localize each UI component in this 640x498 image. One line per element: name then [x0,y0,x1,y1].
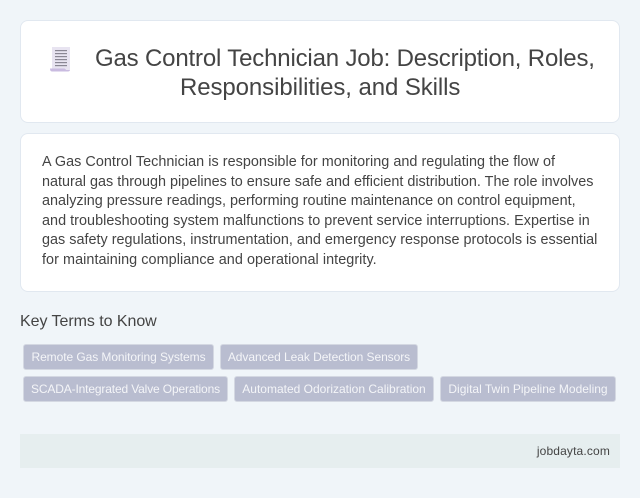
description text [42,154,597,268]
description text: gas safety regulations, instrumentation, and emergency response protocols is essential [42,232,597,248]
tag: Automated Odorization Calibration [242,382,426,396]
panel: title card [20,20,620,123]
tag: SCADA-Integrated Valve Operations [31,382,220,396]
tag [234,376,434,402]
tag: Advanced Leak Detection Sensors [228,350,410,364]
description text: natural gas through pipelines to ensure safe and efficient distribution. The role involves [42,174,593,190]
description text: A Gas Control Technician is responsible for monitoring and regulating the flow of [42,154,555,170]
panel: description card [20,133,620,292]
title [95,45,595,101]
description text: analyzing pressure readings, performing routine maintenance on control equipment, [42,193,576,209]
tag [23,376,228,402]
icon: document scroll [50,47,70,72]
title: Responsibilities, and Skills [180,74,460,101]
description text: for maintaining compliance and operational integrity. [42,252,377,268]
footer bar [20,434,620,468]
heading: key terms: Key Terms to Know [20,313,157,330]
footer text: jobdayta.com [537,444,610,458]
tag [220,344,418,370]
tag [440,376,616,402]
tag: Digital Twin Pipeline Modeling [448,382,608,396]
tag: Remote Gas Monitoring Systems [31,350,206,364]
title: Gas Control Technician Job: Description, Roles, [95,45,595,72]
tag [23,344,214,370]
description text: and troubleshooting system malfunctions to prevent service interruptions. Expertise in [42,213,590,229]
